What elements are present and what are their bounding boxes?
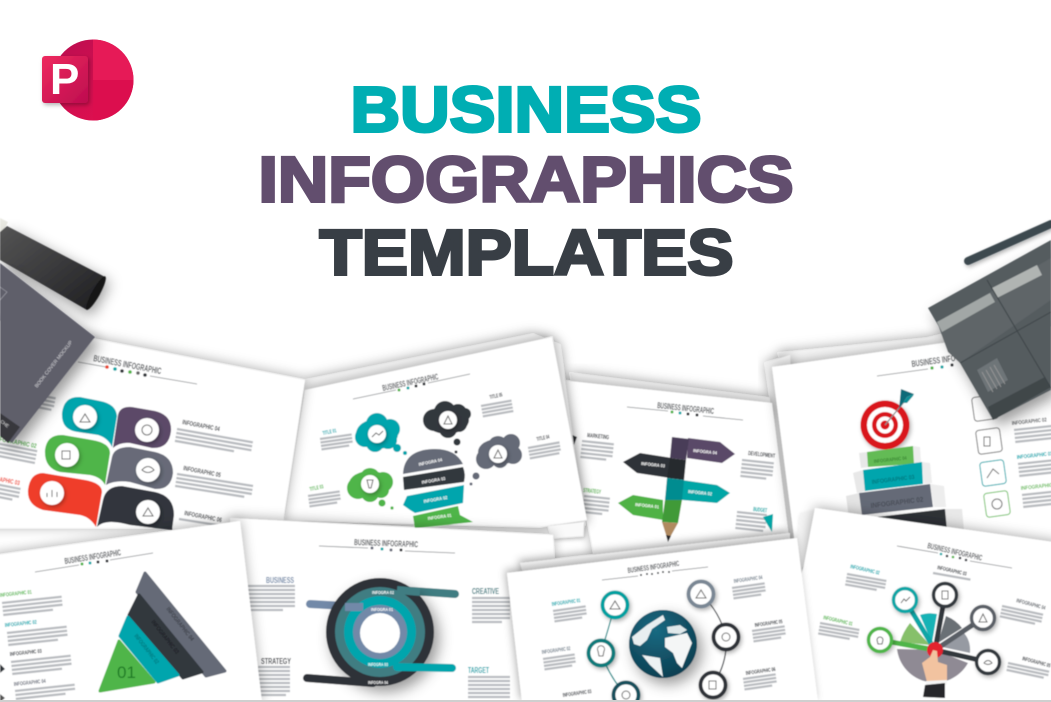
- step chart: [846, 446, 964, 530]
- cloud: teal: [355, 413, 407, 455]
- cloud: grey: [470, 434, 522, 486]
- dark notebook: [928, 240, 1051, 420]
- panel: target sheet: [772, 325, 1051, 560]
- signpost pencil chart: INFOGRA 03: [641, 461, 666, 469]
- head chart: INFOGRA 02: [423, 495, 448, 504]
- panel: triangle sheet: [0, 521, 262, 702]
- signpost pencil chart: INFOGRA 01: [635, 502, 660, 510]
- sheet labels: STRATEGY: [261, 657, 291, 666]
- icon: PowerPoint logo: [42, 40, 134, 120]
- sheet labels: INFOGRAPHIC 01: [551, 598, 581, 608]
- sheet labels: TITLE 03: [309, 484, 324, 493]
- panel: globe sheet: [507, 533, 818, 702]
- sheet title: BUSINESS INFO: [911, 353, 956, 369]
- sheet labels: INFOGRAPHIC 04: [14, 679, 47, 688]
- triangle chart: INFOGRAPHIC 02: [132, 634, 160, 666]
- panel: ring sheet: [230, 518, 556, 702]
- sheet labels: INFOGRAPHIC 03: [562, 689, 592, 699]
- sheet labels: INFOGRAPHIC 01: [823, 615, 853, 628]
- sheet labels: [0, 590, 76, 702]
- step chart: INFOGRAPHIC 04: [874, 456, 907, 465]
- sheet labels: INFOGRAPHIC 04: [733, 575, 764, 585]
- sheet labels: INFOGRAPHIC 06: [184, 510, 223, 524]
- sheet labels: INFOGRAPHIC 02: [850, 564, 880, 577]
- sheet labels: BUSINESS: [266, 576, 294, 585]
- sheet labels: INFOGRAPHIC 05: [183, 465, 222, 479]
- sheet labels: INFOGRAPHIC 06: [745, 667, 776, 677]
- title line 1: BUSINESS: [350, 74, 702, 146]
- sheet labels: [541, 575, 786, 699]
- sheet labels: [818, 564, 1051, 679]
- signpost pencil chart: INFOGRA 02: [688, 489, 713, 497]
- triangle chart: [100, 573, 225, 691]
- pie chart with nodes: [868, 584, 1000, 698]
- head chart: [403, 449, 473, 528]
- sheet labels: DEVELOPMENT: [748, 451, 775, 460]
- icon: target with arrow: [860, 389, 914, 450]
- roll of paper: [0, 218, 109, 312]
- icon: PowerPoint logo: P: [50, 55, 79, 104]
- sheet labels: TARGET: [468, 666, 489, 675]
- ring chart: INFOGRA 02: [372, 590, 394, 595]
- panel: leaf infographic sheet: [0, 317, 305, 530]
- cloud: green: [347, 468, 394, 510]
- title line 2: INFOGRAPHICS: [258, 144, 794, 216]
- triangle chart: INFOGRAPHIC 04: [164, 607, 195, 643]
- right notebook and pen: [928, 224, 1051, 420]
- ring chart: INFOGRA 04: [368, 680, 388, 685]
- cloud: dark: [423, 401, 471, 454]
- sheet labels: INFOGRAPHIC 02: [5, 620, 37, 629]
- sheet title: BUSINESS INFOGRAPHIC: [381, 371, 439, 393]
- ring chart: [307, 578, 455, 686]
- node circles: [588, 582, 738, 702]
- sheet labels: INFOGRAPHIC 02: [541, 646, 571, 656]
- sheet title: BUSINESS INFOGRAPHIC: [657, 400, 715, 416]
- book: BOOK COVER MOCKUP: [34, 339, 75, 389]
- sheet title: BUSINESS INFOGRAPHIC: [64, 547, 122, 566]
- ring chart: INFOGRA 03: [368, 662, 388, 667]
- sheet labels: [570, 433, 775, 532]
- sheet labels: [248, 576, 510, 697]
- sheet labels: [0, 395, 253, 525]
- panel: stacked target sheet background: [765, 330, 960, 540]
- sheet title: BUSINESS INFOGRAPHIC: [627, 559, 680, 575]
- triangle chart: INFOGRAPHIC 03: [149, 620, 180, 656]
- step chart: INFOGRAPHIC 03: [872, 475, 915, 486]
- panel: pencil sheet: [560, 373, 790, 560]
- title line 3: TEMPLATES: [320, 216, 734, 288]
- signpost pencil chart: INFOGRA 04: [693, 448, 718, 456]
- sheet labels: MARKETING: [587, 433, 609, 441]
- leaf chart: [28, 397, 174, 530]
- signpost pencil chart: [618, 437, 735, 542]
- panel: head infographic sheet: [285, 334, 587, 538]
- left notebook and roll: [0, 218, 109, 443]
- globe: [629, 610, 697, 678]
- panel: hand pie sheet: [790, 508, 1051, 702]
- sheet labels: INFOGRAPHIC 03: [10, 649, 42, 658]
- sheet labels: INFOGRAPHIC 05: [754, 619, 783, 629]
- sheet title: BUSINESS INFOGRAPHIC: [927, 541, 983, 563]
- head chart: INFOGRA 03: [421, 476, 446, 485]
- sheet labels: CREATIVE: [472, 587, 499, 596]
- ring chart: INFOGRA 01: [371, 607, 393, 612]
- icon: hand pressing button: [922, 650, 947, 698]
- sheet labels: TITLE 04: [536, 434, 551, 443]
- sheet labels: TITLE 01: [322, 428, 337, 437]
- sheet labels: [308, 392, 561, 506]
- step chart: INFOGRAPHIC 02: [870, 497, 924, 510]
- title: [258, 74, 794, 288]
- sheet title: BUSINESS INFOGRAPHIC: [93, 353, 163, 376]
- sheet title: BUSINESS INFOGRAPHIC: [354, 537, 418, 549]
- sheet labels: STRATEGY: [583, 488, 601, 496]
- icon boxes: [971, 394, 1011, 518]
- head chart: INFOGRA 04: [418, 457, 443, 467]
- sheet labels: BUDGET: [753, 507, 768, 514]
- arcs connecting nodes: [601, 605, 626, 695]
- sheet labels: INFOGRAPHIC 04: [182, 419, 221, 433]
- sheet labels: TITLE 05: [489, 392, 503, 401]
- sheet labels: [1012, 417, 1051, 507]
- bottom edge strip: [0, 700, 1051, 702]
- book: [0, 263, 95, 443]
- sheet labels: INFOGRAPHIC 03: [937, 565, 967, 578]
- sheets collage: [0, 218, 1051, 702]
- pen: [968, 224, 1051, 261]
- triangle chart: 01: [117, 663, 136, 682]
- sheet labels: INFOGRAPHIC 01: [0, 590, 32, 599]
- head chart: INFOGRA 01: [427, 513, 452, 521]
